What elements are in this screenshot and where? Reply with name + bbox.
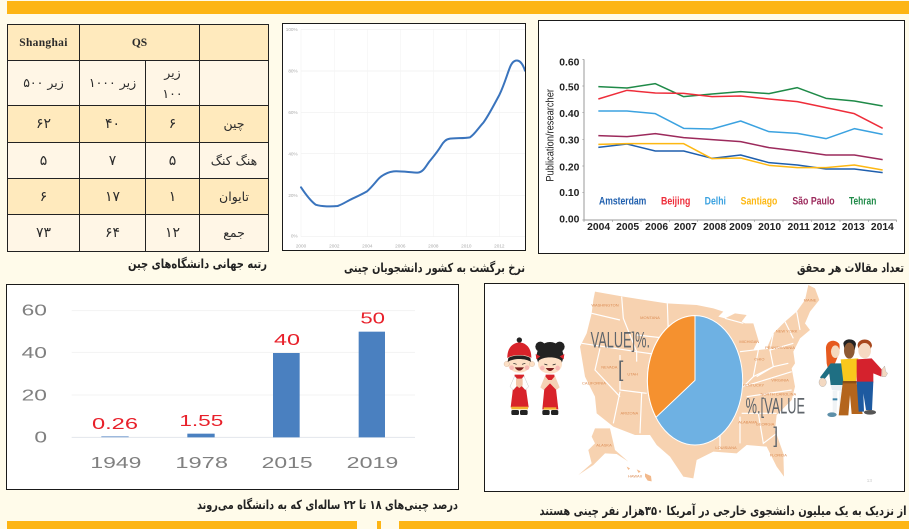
map of the United States: FLORIDA: [770, 452, 787, 457]
icon: three students: [819, 339, 888, 417]
panel: publications per researcher line chart: Delhi: [705, 196, 726, 208]
panel: publications per researcher line chart: 0.00: [559, 215, 580, 226]
panel: publications per researcher line chart: 2009: [729, 222, 752, 233]
panel: publications per researcher line chart: 2014: [871, 222, 894, 233]
pie labels: ]: [773, 423, 778, 448]
pie labels: %.[VALUE: [746, 393, 805, 418]
girl: [535, 342, 565, 415]
panel: return rate line chart: 2004: [362, 243, 373, 248]
panel: publications per researcher line chart: Amsterdam: [599, 196, 646, 208]
pie labels: [: [618, 357, 623, 382]
panel: return rate line chart: 100%: [286, 27, 298, 32]
panel: publications per researcher line chart: 0.50: [559, 82, 580, 93]
panel: publications per researcher line chart: 0.20: [559, 162, 580, 173]
panel: enrollment bar chart: 1.55: [179, 413, 223, 430]
panel: publications per researcher line chart: Tehran: [849, 196, 876, 208]
panel: publications per researcher line chart: 2007: [674, 222, 697, 233]
panel: publications per researcher line chart: 2013: [842, 222, 865, 233]
panel: university ranking table: ۶۴: [105, 225, 120, 241]
panel: enrollment bar chart: 2015: [262, 455, 313, 472]
pie labels: VALUE]%.: [591, 328, 650, 353]
panel: university ranking table: ۷۳: [36, 225, 51, 241]
map of the United States: UTAH: [627, 371, 638, 376]
panel: return rate line chart: [282, 23, 526, 251]
map of the United States: MAINE: [804, 297, 817, 302]
panel: return rate line chart: 2002: [329, 243, 340, 248]
panel: enrollment bar chart: 20: [22, 388, 47, 405]
map of the United States: ALASKA: [596, 442, 612, 447]
boy: [504, 337, 535, 415]
top banner bar: [7, 1, 909, 14]
panel: university ranking table: ۵: [169, 152, 176, 168]
panel: publications per researcher line chart: 0.10: [559, 188, 580, 199]
panel: enrollment bar chart: 0.26: [92, 416, 138, 433]
map of the United States: PENNSYLVANIA: [765, 345, 795, 350]
panel: university ranking table: [7, 24, 269, 252]
bottom banner bar right: [399, 521, 909, 529]
panel: return rate line chart: 0%: [291, 233, 298, 238]
panel: return rate line chart: 80%: [288, 69, 298, 74]
panel: return rate line chart: 2008: [428, 243, 439, 248]
bottom banner bar left: [7, 521, 357, 529]
map of the United States: [578, 285, 819, 481]
panel: publications per researcher line chart: 2008: [703, 222, 726, 233]
panel: university ranking table: ۱۲: [165, 225, 180, 241]
map of the United States: ALABAMA: [738, 420, 757, 425]
panel: university ranking table: ۵: [40, 152, 47, 168]
right student: [857, 339, 888, 415]
panel: publications per researcher line chart: 2006: [645, 222, 668, 233]
panel: return rate line chart: 2010: [461, 243, 472, 248]
panel: enrollment bar chart: 50: [360, 311, 385, 328]
panel: publications per researcher line chart: 0.60: [559, 57, 580, 68]
map of the United States: MICHIGAN: [739, 339, 759, 344]
panel: publications per researcher line chart: Beijing: [661, 196, 690, 208]
panel: publications per researcher line chart: 0.30: [559, 136, 580, 147]
slide number: 13: [867, 478, 872, 483]
panel: university ranking table: ۱۷: [105, 188, 120, 204]
panel: university ranking table: زیر ۱۰۰۰: [89, 75, 136, 90]
left student: [819, 341, 845, 417]
panel: university ranking table: چین: [223, 116, 244, 131]
middle student: [839, 339, 863, 415]
panel: university ranking table: ۶: [169, 116, 176, 132]
panel: enrollment bar chart: 40: [274, 332, 300, 349]
map of the United States: NORTH CAROLINA: [761, 392, 796, 397]
panel: university ranking table: ۱۰۰: [162, 86, 183, 101]
pie chart: [647, 316, 743, 445]
panel: university ranking table: ۱: [169, 188, 176, 204]
panel: enrollment bar chart: 60: [22, 302, 47, 319]
map of the United States: ARIZONA: [620, 411, 639, 416]
panel: university ranking table: ۴۰: [105, 116, 120, 132]
panel: enrollment bar chart: 40: [22, 345, 47, 362]
panel: return rate line chart: 2000: [296, 243, 307, 248]
map of the United States: CALIFORNIA: [582, 381, 606, 386]
map of the United States: OHIO: [754, 357, 764, 362]
panel: university ranking table: ۷: [109, 152, 116, 168]
panel: enrollment bar chart: 2019: [347, 455, 398, 472]
pie labels: [591, 328, 805, 448]
panel: enrollment bar chart: 1949: [90, 455, 141, 472]
map of the United States: NEVADA: [601, 365, 618, 370]
map of the United States: VIRGINIA: [771, 377, 789, 382]
icon: Chinese boy and girl: [504, 337, 565, 415]
panel: publications per researcher line chart: Santiago: [741, 196, 778, 208]
panel: enrollment bar chart: 1978: [175, 455, 228, 472]
map of the United States: NEW YORK: [776, 328, 798, 333]
panel: university ranking table: QS: [132, 36, 147, 48]
panel: university ranking table: هنگ کنگ: [211, 152, 257, 168]
panel: return rate line chart: 20%: [288, 193, 298, 198]
panel: enrollment bar chart: 0: [34, 430, 47, 447]
panel: publications per researcher line chart: Publication/researcher: [544, 89, 556, 182]
bottom banner tick: [377, 521, 381, 529]
panel: publications per researcher line chart: 2004: [587, 222, 610, 233]
panel: university ranking table: زیر ۵۰۰: [23, 75, 64, 90]
panel: university ranking table: ۶۲: [36, 116, 51, 132]
map of the United States: HAWAII: [628, 473, 642, 478]
panel: return rate line chart: 40%: [288, 151, 298, 156]
panel: university ranking table: زیر: [164, 65, 181, 80]
panel: university ranking table: جمع: [223, 225, 245, 240]
panel: university ranking table: ۶: [40, 188, 47, 204]
panel: publications per researcher line chart: 2011: [787, 222, 810, 233]
panel: publications per researcher line chart: 2005: [616, 222, 639, 233]
map of the United States: LOUISIANA: [715, 445, 737, 450]
panel: enrollment bar chart: [6, 284, 459, 490]
panel: publications per researcher line chart: 2012: [813, 222, 836, 233]
panel: return rate line chart: 2006: [395, 243, 406, 248]
panel: return rate line chart: 60%: [288, 110, 298, 115]
panel: publications per researcher line chart: 2010: [758, 222, 781, 233]
map of the United States: WASHINGTON: [591, 302, 619, 307]
panel: university ranking table: Shanghai: [19, 36, 68, 48]
panel: publications per researcher line chart: [538, 20, 905, 254]
panel: return rate line chart: 2012: [494, 243, 505, 248]
map of the United States: GEORGIA: [756, 422, 775, 427]
panel: Chinese students in US map: [484, 283, 905, 492]
panel: university ranking table: تایوان: [219, 188, 249, 204]
map of the United States: MONTANA: [640, 315, 660, 320]
map of the United States: KENTUCKY: [742, 382, 765, 387]
panel: publications per researcher line chart: São Paulo: [792, 196, 835, 208]
panel: publications per researcher line chart: 0.40: [559, 109, 580, 120]
